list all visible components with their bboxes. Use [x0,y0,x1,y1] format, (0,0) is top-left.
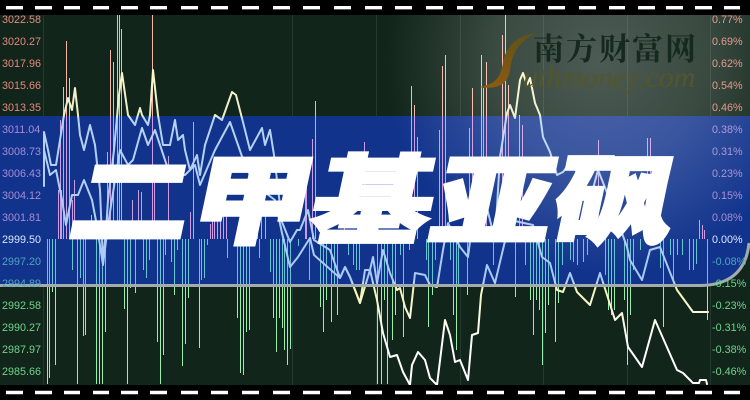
left axis labels: 3020.27 [2,36,41,48]
right axis labels: 0.08% [712,212,743,224]
right axis labels: -0.38% [712,344,747,356]
right axis labels: 0.54% [712,80,743,92]
right axis labels: 0.23% [712,168,743,180]
left axis labels: 2990.27 [2,322,41,334]
panel: blue title band [0,116,750,285]
bottom film strip border [0,385,750,400]
left axis labels: 2994.89 [2,278,41,290]
watermark url: uthmoney.com [523,61,695,94]
left axis labels: 3011.04 [2,124,40,136]
left axis labels [2,14,41,378]
line chart: index trend lines [44,70,708,385]
right axis labels: 0.46% [712,102,743,114]
left axis labels: 2999.50 [2,234,41,246]
watermark Chinese name: 南方财富网 [533,24,698,69]
right axis labels: 0.77% [712,14,743,26]
right axis labels: 0.15% [712,190,743,202]
right axis labels: -0.31% [712,322,747,334]
left axis labels: 3006.43 [2,168,41,180]
left axis labels: 3008.73 [2,146,41,158]
right axis labels: 0.62% [712,58,743,70]
right axis labels: -0.46% [712,366,747,378]
right axis labels: 0.31% [712,146,743,158]
right axis labels: -0.15% [712,278,747,290]
right axis labels: 0.38% [712,124,743,136]
bar chart: rising bars [58,15,704,239]
top film strip border [0,0,750,15]
left axis labels: 3013.35 [2,102,41,114]
left axis labels: 2992.58 [2,300,41,312]
left axis labels: 2997.20 [2,256,41,268]
watermark glow [385,15,750,285]
left axis labels: 3004.12 [2,190,41,202]
left axis labels: 2985.66 [2,366,41,378]
right axis labels: -0.23% [712,300,747,312]
title: 二甲基亚砜 [59,123,692,264]
right axis labels: 0.69% [712,36,743,48]
icon: logo swoosh [479,33,536,88]
bottom edge line of band [0,243,749,286]
left axis labels: 3015.66 [2,80,41,92]
watermark logo [479,24,698,94]
bar chart: falling bars [48,239,708,384]
left axis labels: 3001.81 [2,212,41,224]
right axis labels [712,14,747,378]
left axis labels: 3017.96 [2,58,41,70]
right axis labels: -0.08% [712,256,747,268]
left axis labels: 3022.58 [2,14,41,26]
left axis labels: 2987.97 [2,344,41,356]
right axis labels: 0.00% [712,234,743,246]
